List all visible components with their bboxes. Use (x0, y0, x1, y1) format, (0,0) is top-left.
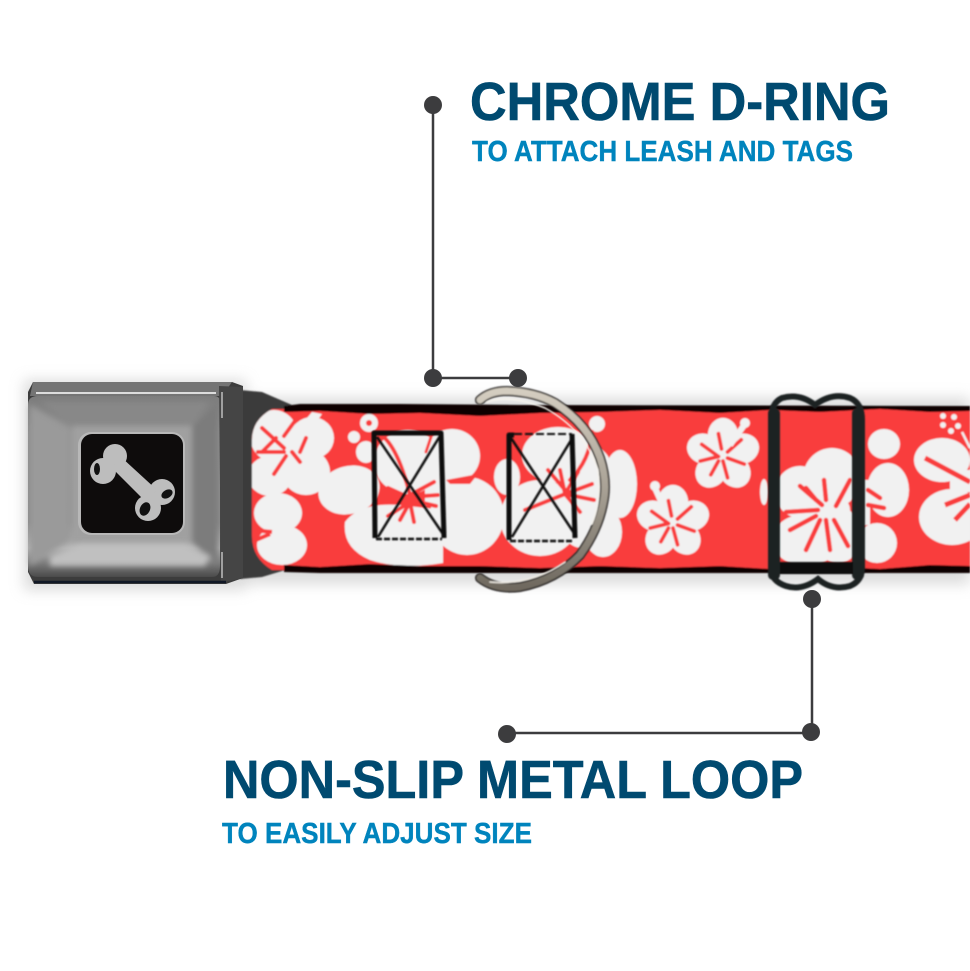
flower G (760, 429, 909, 566)
soft shadow under collar (24, 380, 970, 590)
seatbelt buckle (28, 382, 243, 584)
buckle face (28, 396, 220, 577)
hibiscus flower pattern (248, 410, 970, 572)
non-slip metal loop (768, 396, 864, 587)
flower B (254, 493, 307, 565)
box-x stitching right (509, 434, 576, 541)
buckle top lip (30, 382, 232, 396)
collar strap (240, 390, 970, 579)
icon: bone (90, 444, 175, 521)
black woven edges (284, 404, 970, 416)
callout line: D-ring (424, 96, 527, 387)
small bud (360, 414, 378, 432)
heading: metal loop: NON-SLIP METAL LOOP (223, 750, 803, 810)
chrome D-ring (480, 391, 605, 588)
black emblem (81, 434, 183, 533)
dark webbing behind buckle (240, 390, 292, 579)
subheading: adjust size: TO EASILY ADJUST SIZE (222, 818, 532, 850)
subheading: attach leash: TO ATTACH LEASH AND TAGS (472, 136, 853, 168)
emblem frame highlight (78, 432, 185, 535)
flower H (914, 438, 970, 545)
box-x stitching left (374, 433, 444, 539)
flower C stamens (376, 431, 438, 522)
flower A (248, 410, 334, 496)
heading: chrome D-ring: CHROME D-RING (470, 72, 890, 132)
buckle bevels (30, 402, 218, 566)
red strap (252, 409, 970, 570)
flower C big (313, 414, 504, 566)
buckle body (28, 382, 243, 584)
flower D (494, 416, 637, 557)
flower C gaps (446, 474, 476, 485)
flowers E and F (686, 416, 760, 489)
callout line: metal loop (498, 590, 821, 743)
buckle side band (219, 386, 243, 583)
